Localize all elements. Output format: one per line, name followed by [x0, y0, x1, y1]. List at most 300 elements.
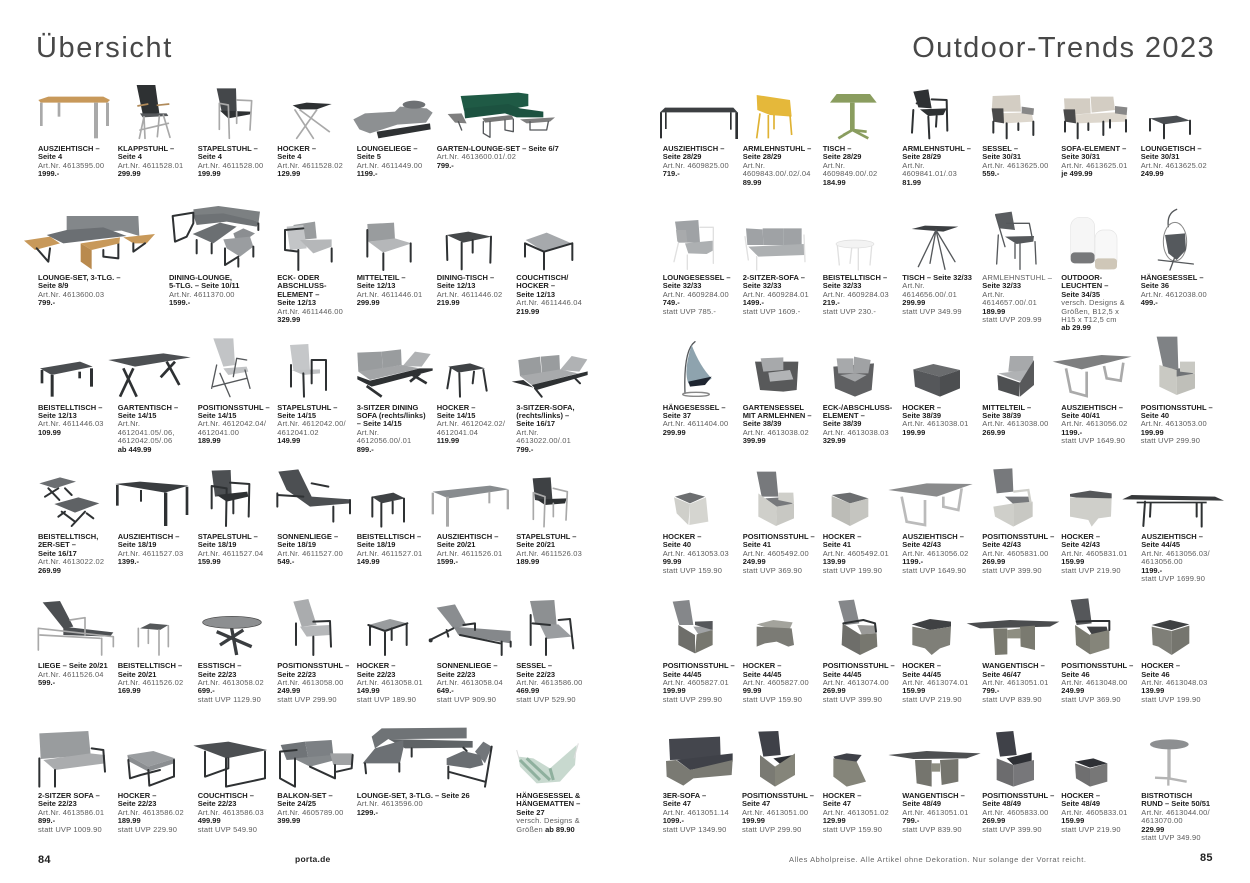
text: Armlehnstuhl — [902, 145, 971, 187]
text: Armlehnstuhl: ARMLEHNSTUHL – — [982, 273, 1052, 282]
text: Loungesessel: Seite 32/33 — [663, 281, 701, 290]
icon: wooden extending table — [38, 97, 110, 138]
text: Gartentisch: GARTENTISCH – — [118, 402, 178, 412]
text: Klappstuhl — [118, 144, 183, 178]
text: Armlehnstuhl — [982, 274, 1052, 324]
text: Dining-Tisch: 219.99 — [437, 298, 460, 307]
text: Loungesessel: 749.- — [663, 298, 680, 307]
text: Dining-Lounge: DINING-LOUNGE, — [169, 273, 232, 282]
text: Beistelltisch: BEISTELLTISCH – — [823, 273, 887, 282]
icon: dark armchair — [912, 89, 947, 138]
text: Sessel: Art.Nr. 4613586.00 — [516, 678, 582, 687]
text: Hocker — [902, 404, 968, 437]
icon: corner element — [285, 222, 332, 270]
text: Tisch: TISCH – — [823, 144, 851, 153]
text: Sonnenliege: Art.Nr. 4611527.00 — [277, 549, 343, 558]
text: Positionsstuhl: Art.Nr. 4613074.00 — [823, 678, 889, 687]
text: Loungeliege: LOUNGELIEGE – — [357, 144, 418, 153]
text: Hocker: Art.Nr. 4613038.01 — [902, 419, 968, 428]
text: Garten-Lounge-Set: GARTEN-LOUNGE-SET – Seite 6/7 — [437, 144, 559, 153]
text: Hängesessel und Hängematten: HÄNGESESSEL & — [516, 791, 580, 800]
text: Hocker — [823, 533, 889, 575]
text: Loungesessel — [663, 274, 730, 316]
text: Sonnenliege: Art.Nr. 4613058.04 — [437, 678, 503, 687]
text: Hocker: Art.Nr. 4613586.02 — [118, 808, 184, 817]
text: 3-Sitzer-Sofa: 799.- — [516, 445, 533, 454]
text: Wangentisch — [902, 792, 968, 834]
icon: balcony set — [280, 740, 353, 787]
text: Tisch: 4609849.00/.02 — [823, 169, 877, 178]
text: Hocker: statt UVP 229.90 — [118, 825, 177, 834]
text: Balkon-Set: Art.Nr. 4605789.00 — [277, 808, 344, 817]
text: Hocker: HOCKER – — [1061, 532, 1100, 541]
text: Positionsstuhl: Seite 40 — [1141, 411, 1169, 420]
text: Armlehnstuhl: Art.Nr. — [982, 290, 1005, 299]
text: 2-Sitzer Sofa: Art.Nr. 4613586.01 — [38, 808, 104, 817]
text: Hocker: Seite 4 — [277, 152, 301, 161]
text: Bistrotisch rund: Art.Nr. 4613044.00/ — [1141, 808, 1210, 817]
text: Klappstuhl: 299.99 — [118, 169, 141, 178]
text: Gartentisch: Art.Nr. — [118, 419, 140, 428]
text: Ausziehtisch: Art.Nr. 4611527.03 — [118, 549, 183, 558]
icon: two seater sofa — [39, 731, 105, 787]
icon: green table — [830, 94, 877, 138]
text: Gartensessel: Seite 38/39 — [743, 419, 781, 428]
text: Stapelstuhl — [198, 144, 263, 178]
text: Ausziehtisch Seite 4: Art.Nr. 4613595.00 — [38, 161, 104, 170]
text: Stapelstuhl: 189.99 — [516, 557, 539, 566]
text: Eck- oder Abschlusselement: ELEMENT – — [277, 290, 319, 299]
text: Stapelstuhl: STAPELSTUHL – — [198, 144, 258, 153]
text: Beistelltisch 2er-Set: 2ER-SET – — [38, 540, 76, 549]
text: Positionsstuhl — [823, 662, 895, 704]
text: Klappstuhl: Art.Nr. 4611528.01 — [118, 161, 183, 170]
icon: rattan stool light — [832, 493, 868, 526]
text: Positionsstuhl Seite 44/45: statt UVP 299.90 — [663, 695, 722, 704]
text: Ausziehtisch: Seite 40/41 — [1061, 411, 1100, 420]
text: Positionsstuhl — [1141, 404, 1213, 446]
text: Klappstuhl: KLAPPSTUHL – — [118, 144, 174, 153]
text: Liege — [38, 661, 108, 687]
text: Sonnenliege: Seite 18/19 — [277, 540, 316, 549]
icon: dark stool — [447, 363, 487, 397]
text: Balkon-Set: BALKON-SET – — [277, 791, 333, 800]
text: Eck-/Abschlusselement: 329.99 — [823, 436, 846, 445]
text: Loungesessel: Art.Nr. 4609284.00 — [663, 290, 729, 299]
text: Couchtisch: 499.99 — [198, 816, 221, 825]
text: Hocker: HOCKER – — [902, 661, 941, 670]
text: Positionsstuhl: 269.99 — [982, 816, 1005, 825]
text: Hocker — [436, 402, 505, 445]
text: Hängesessel: Art.Nr. 4612038.00 — [1141, 290, 1207, 299]
text: Dining-Tisch: Seite 12/13 — [437, 281, 475, 290]
text: Hängesessel und Hängematten: Größen ab 89.90 — [516, 825, 575, 834]
text: Beistelltisch 2er-Set: Seite 16/17 — [38, 549, 77, 558]
icon: armchair — [530, 600, 573, 655]
panel: furniture page 84 lower right — [363, 600, 578, 787]
text: Ausziehtisch — [118, 532, 183, 566]
text: Positionsstuhl: Seite 46 — [1061, 670, 1090, 679]
text: Dining-Lounge: 1599.- — [169, 298, 190, 307]
icon: reclining chair — [293, 599, 331, 655]
text: Tisch: 4614656.00/.01 — [902, 290, 957, 299]
text: Positionsstuhl: Art.Nr. 4613048.00 — [1061, 678, 1128, 687]
text: 2-Sitzer-Sofa: Seite 32/33 — [743, 281, 781, 290]
text: 3-Sitzer Dining Sofa: 3-SITZER DINING — [357, 402, 418, 412]
text: Positionsstuhl: statt UVP 399.90 — [823, 695, 882, 704]
text: Hängesessel Seite 37: Art.Nr. 4611404.00 — [663, 419, 728, 428]
text: Positionsstuhl: Art.Nr. 4612042.04/ — [198, 419, 266, 428]
text: 3er-Sofa: statt UVP 1349.90 — [663, 825, 726, 834]
icon: extending table silver — [432, 486, 509, 527]
text: Outdoor-Leuchten: versch. Designs & — [1061, 298, 1125, 307]
text: Positionsstuhl: POSITIONSSTUHL – — [742, 791, 814, 800]
text: Hocker: HOCKER – — [357, 661, 395, 670]
panel: furniture page 85 middle left — [674, 342, 973, 526]
icon: lounge set with wooden shelves — [24, 216, 155, 269]
text: Hocker: statt UVP 159.90 — [823, 825, 882, 834]
text: Sessel: Art.Nr. 4613625.00 — [982, 161, 1048, 170]
text: Hocker: Art.Nr. 4605492.01 — [823, 549, 889, 558]
text: Eck-/Abschlusselement: Art.Nr. 4613038.03 — [823, 428, 889, 437]
text: Stapelstuhl: 149.99 — [277, 436, 300, 445]
panel: furniture page 84 upper left — [24, 85, 332, 270]
text: 3er-Sofa: 1099.- — [663, 816, 684, 825]
text: Wangentisch: Art.Nr. 4613051.01 — [902, 808, 968, 817]
text: Lounge-Set 3-tlg Seite 26: LOUNGE-SET, 3-TLG. – Seite 26 — [357, 791, 470, 800]
icon: dark extending table — [1122, 495, 1224, 527]
text: 2-Sitzer Sofa: 899.- — [38, 816, 55, 825]
text: Positionsstuhl — [198, 402, 270, 445]
text: Gartensessel: Art.Nr. 4613038.02 — [743, 428, 809, 437]
footer: porta.de: porta.de — [295, 854, 331, 864]
text: Hängesessel und Hängematten: Seite 27 — [516, 808, 545, 817]
text: Hocker: HOCKER – — [1141, 661, 1180, 670]
text: Positionsstuhl: Seite 22/23 — [277, 670, 316, 679]
text: Bistrotisch rund: 4613070.00 — [1141, 816, 1183, 825]
icon: side table silver — [138, 623, 168, 655]
panel: furniture page 85 lower left — [666, 600, 981, 787]
text: Positionsstuhl: statt UVP 299.90 — [277, 695, 337, 704]
text: Lounge-Set 3-tlg Seite 26: 1299.- — [357, 808, 378, 817]
text: Hängesessel und Hängematten: versch. Designs & — [516, 816, 580, 825]
text: Wangentisch: Seite 46/47 — [982, 670, 1021, 679]
icon: extending table light — [888, 483, 973, 525]
text: Beistelltisch: Seite 18/19 — [357, 540, 395, 549]
text: Positionsstuhl: statt UVP 399.90 — [982, 566, 1042, 575]
text: Ausziehtisch Seite 28/29: Seite 28/29 — [663, 152, 701, 161]
text: 3-Sitzer Dining Sofa — [356, 402, 426, 454]
text: Armlehnstuhl: Art.Nr. — [743, 161, 765, 170]
text: Sessel: SESSEL – — [982, 144, 1018, 153]
text: Beistelltisch: 149.99 — [357, 557, 380, 566]
title: Outdoor-Trends 2023: Outdoor-Trends 2023 — [912, 32, 1215, 64]
text: Positionsstuhl: statt UVP 299.90 — [1141, 436, 1200, 445]
text: Ausziehtisch: 1199.- — [1061, 428, 1082, 437]
text: Armlehnstuhl: ARMLEHNSTUHL – — [902, 144, 971, 153]
icon: rattan footstool dark cushion — [833, 753, 866, 787]
panel: furniture page 85 upper left — [660, 89, 958, 270]
text: Wangentisch: 799.- — [902, 816, 919, 825]
text: Stapelstuhl: 4612041.02 — [277, 428, 319, 437]
text: Hocker — [277, 144, 343, 178]
text: Positionsstuhl — [277, 661, 350, 704]
text: Sessel: Seite 22/23 — [516, 670, 555, 679]
text: Ausziehtisch: 1399.- — [118, 557, 139, 566]
text: Hängesessel: HÄNGESESSEL – — [1141, 273, 1204, 282]
text: Hängesessel Seite 37: Seite 37 — [663, 411, 691, 420]
icon: garden table — [108, 353, 191, 397]
text: Outdoor-Leuchten: Größen, B12,5 x — [1061, 307, 1119, 316]
text: Ausziehtisch: AUSZIEHTISCH – — [1141, 532, 1203, 541]
text: Liege: LIEGE – Seite 20/21 — [38, 661, 108, 670]
text: Sofa-Element: Seite 30/31 — [1061, 152, 1100, 161]
panel: furniture page 84 lower left — [38, 599, 353, 787]
text: Beistelltisch: Seite 32/33 — [823, 281, 861, 290]
text: Hocker: HOCKER – — [118, 791, 156, 800]
text: Ausziehtisch: statt UVP 1699.90 — [1141, 574, 1205, 583]
text: Ausziehtisch Seite 28/29: AUSZIEHTISCH – — [663, 144, 724, 153]
text: Bistrotisch rund: RUND – Seite 50/51 — [1141, 799, 1210, 808]
icon: stool dark cushion — [1152, 620, 1189, 655]
text: Liege: 599.- — [38, 678, 55, 687]
text: Positionsstuhl: Seite 47 — [742, 799, 770, 808]
text: Beistelltisch 2er-Set: 269.99 — [38, 566, 61, 575]
text: Armlehnstuhl: 89.99 — [743, 178, 761, 187]
text: Gartensessel: GARTENSESSEL — [743, 402, 804, 412]
text: Hocker — [902, 662, 968, 704]
text: Ausziehtisch Seite 4: 1999.- — [38, 169, 59, 178]
text: Loungeliege: Seite 5 — [357, 152, 381, 161]
text: Couchtisch/Hocker: 219.99 — [516, 307, 539, 316]
text: Positionsstuhl: 199.99 — [742, 816, 765, 825]
text: Positionsstuhl Seite 44/45: 199.99 — [663, 686, 686, 695]
text: 3er-Sofa: 3ER-SOFA – — [663, 791, 706, 800]
icon: white side table — [836, 240, 874, 270]
text: Balkon-Set: 399.99 — [277, 816, 300, 825]
text: Mittelteil: 269.99 — [982, 428, 1005, 437]
footer: disclaimer: Alles Abholpreise. Alle Artikel ohne Dekoration. Nur solange der Vorrat reicht. — [789, 855, 1086, 864]
text: Esstisch: Art.Nr. 4613058.02 — [198, 678, 264, 687]
text: Mittelteil — [982, 404, 1048, 437]
text: Beistelltisch: 169.99 — [118, 686, 141, 695]
text: Positionsstuhl: Seite 41 — [743, 540, 771, 549]
text: Beistelltisch 2er-Set: BEISTELLTISCH, — [38, 532, 98, 541]
text: Ausziehtisch — [436, 532, 502, 566]
icon: reclining chair dark cushion — [758, 731, 795, 787]
text: 3-Sitzer-Sofa: Seite 16/17 — [516, 419, 555, 428]
text: Positionsstuhl: Art.Nr. 4605833.00 — [982, 808, 1048, 817]
text: Ausziehtisch Seite 4: Seite 4 — [38, 152, 62, 161]
text: Gartentisch — [118, 402, 178, 454]
text: Couchtisch/Hocker: Seite 12/13 — [516, 290, 555, 299]
icon: reclining chair rattan white — [1157, 337, 1195, 395]
text: Outdoor-Leuchten — [1061, 274, 1125, 333]
text: Stapelstuhl: Seite 20/21 — [516, 540, 555, 549]
text: Wangentisch: statt UVP 839.90 — [982, 695, 1042, 704]
text: Hocker: Seite 41 — [823, 540, 851, 549]
icon: side table — [40, 362, 93, 397]
text: Loungesessel: LOUNGESESSEL – — [663, 273, 730, 282]
text: Armlehnstuhl: 189.99 — [982, 307, 1005, 316]
icon: cheek table — [888, 751, 981, 787]
text: Mittelteil: 299.99 — [357, 298, 380, 307]
text: 2-Sitzer Sofa — [38, 791, 104, 834]
text: Wangentisch: 799.- — [982, 686, 999, 695]
icon: long dark table — [660, 108, 738, 139]
text: Liege: Art.Nr. 4611526.04 — [38, 670, 104, 679]
text: Hocker: 139.99 — [823, 557, 846, 566]
text: Loungetisch — [1141, 145, 1207, 179]
text: Ausziehtisch: AUSZIEHTISCH – — [1061, 402, 1123, 412]
text: 2-Sitzer-Sofa: statt UVP 1609.- — [743, 307, 800, 316]
text: Ausziehtisch: Seite 44/45 — [1141, 540, 1180, 549]
text: Gartentisch: ab 449.99 — [118, 445, 151, 454]
text: Positionsstuhl: Art.Nr. 4613053.00 — [1141, 419, 1207, 428]
text: Gartentisch: 4612042.05/.06 — [118, 436, 172, 445]
icon: coffee table stool — [525, 233, 572, 269]
text: Positionsstuhl: statt UVP 399.90 — [982, 825, 1042, 834]
text: Ausziehtisch Seite 28/29: Art.Nr. 4609825.00 — [663, 161, 729, 170]
text: Hocker: statt UVP 219.90 — [1061, 566, 1121, 575]
text: Eck-/Abschlusselement: Seite 38/39 — [823, 419, 861, 428]
text: Beistelltisch: Art.Nr. 4611527.01 — [357, 549, 422, 558]
icon: side table — [372, 493, 405, 527]
text: Couchtisch: Art.Nr. 4613586.03 — [198, 808, 264, 817]
text: Esstisch — [198, 661, 264, 704]
text: Positionsstuhl Seite 44/45: POSITIONSSTUHL – — [663, 661, 735, 670]
icon: middle part seat — [367, 223, 412, 270]
icon: lounge lounger — [353, 101, 433, 138]
text: Ausziehtisch Seite 28/29 — [662, 144, 729, 178]
icon: lounge table — [1150, 116, 1190, 138]
text: Balkon-Set: Seite 24/25 — [277, 799, 316, 808]
text: Armlehnstuhl: 4609843.00/.02/.04 — [743, 169, 811, 178]
text: Eck- oder Abschlusselement: Seite 12/13 — [277, 298, 316, 307]
text: Outdoor-Leuchten: Seite 34/35 — [1061, 290, 1100, 299]
icon: thin leg table — [912, 226, 958, 269]
text: Sofa-Element: je 499.99 — [1061, 169, 1093, 178]
text: Dining-Lounge: 5-TLG. – Seite 10/11 — [169, 281, 239, 290]
icon: extending table dark — [115, 482, 188, 526]
text: Loungeliege — [356, 144, 422, 178]
text: Hocker: Seite 48/49 — [1061, 799, 1100, 808]
icon: stacking chair — [217, 88, 252, 138]
text: Ausziehtisch Seite 28/29: 719.- — [663, 169, 680, 178]
text: Esstisch: Seite 22/23 — [198, 670, 236, 679]
icon: stacking chair silver — [533, 477, 567, 527]
text: Lounge-Set 3-tlg Seite 26: Art.Nr. 4613596.00 — [357, 799, 423, 808]
text: Positionsstuhl: POSITIONSSTUHL – — [1061, 661, 1133, 670]
icon: folding stool — [293, 103, 332, 138]
text: Hocker: 159.99 — [1061, 816, 1084, 825]
text: Stapelstuhl: STAPELSTUHL – — [516, 532, 576, 541]
text: Wangentisch — [982, 662, 1048, 704]
text: Positionsstuhl: 269.99 — [823, 686, 846, 695]
text: Wangentisch: WANGENTISCH – — [902, 791, 965, 800]
text: Positionsstuhl: Art.Nr. 4605492.00 — [743, 549, 809, 558]
text: Positionsstuhl: 199.99 — [1141, 428, 1164, 437]
text: Wangentisch: Seite 48/49 — [902, 799, 941, 808]
text: 2-Sitzer Sofa: Seite 22/23 — [38, 799, 77, 808]
text: Ausziehtisch — [1061, 404, 1128, 446]
text: Positionsstuhl: statt UVP 369.90 — [743, 566, 802, 575]
text: Hocker: Seite 38/39 — [902, 411, 941, 420]
text: Bistrotisch rund: BISTROTISCH — [1141, 791, 1192, 800]
icon: dining table — [447, 232, 492, 269]
text: Couchtisch — [198, 791, 264, 834]
text: Armlehnstuhl: Seite 28/29 — [743, 152, 781, 161]
text: Tisch: Art.Nr. — [902, 281, 925, 290]
text: Beistelltisch — [823, 274, 889, 316]
text: Loungeliege: 1199.- — [357, 169, 378, 178]
text: Hängesessel und Hängematten: HÄNGEMATTEN – — [516, 799, 580, 808]
text: 3-Sitzer Dining Sofa: Art.Nr. — [357, 428, 379, 437]
text: Stapelstuhl: Seite 14/15 — [277, 411, 316, 420]
text: Hocker Seite 40 — [663, 533, 729, 575]
text: Stapelstuhl — [198, 532, 263, 566]
text: Eck- oder Abschlusselement: Art.Nr. 4611446.00 — [277, 307, 343, 316]
text: Loungetisch: LOUNGETISCH – — [1141, 144, 1202, 153]
text: Wangentisch: WANGENTISCH – — [982, 661, 1045, 670]
text: Lounge-Set 3-tlg: 799.- — [38, 298, 55, 307]
text: Mittelteil: MITTELTEIL – — [982, 402, 1031, 412]
text: Hocker: Art.Nr. 4613058.01 — [357, 678, 423, 687]
text: Stapelstuhl: Art.Nr. 4611527.04 — [198, 549, 263, 558]
icon: lounger silver — [38, 601, 113, 655]
text: Positionsstuhl: Art.Nr. 4613051.00 — [742, 808, 808, 817]
text: Ausziehtisch: AUSZIEHTISCH – — [437, 532, 498, 541]
icon: reclining chair rattan — [993, 468, 1033, 527]
text: Ausziehtisch: 1199.- — [902, 557, 923, 566]
text: Hocker — [1141, 662, 1208, 704]
text: Armlehnstuhl: 81.99 — [902, 178, 921, 187]
text: Loungetisch: Art.Nr. 4613625.02 — [1141, 161, 1207, 170]
text: Hocker: Seite 22/23 — [357, 670, 395, 679]
icon: hammock — [517, 743, 578, 783]
text: Tisch — [823, 145, 877, 187]
text: 2-Sitzer-Sofa: 1499.- — [743, 298, 764, 307]
text: Eck-/Abschlusselement: ECK-/ABSCHLUSS- — [823, 402, 892, 412]
text: 3er-Sofa — [663, 792, 729, 834]
text: Sessel: Seite 30/31 — [982, 152, 1021, 161]
text: Beistelltisch — [118, 661, 183, 695]
text: 2-Sitzer-Sofa: Art.Nr. 4609284.01 — [743, 290, 809, 299]
text: Beistelltisch — [356, 532, 422, 566]
text: Stapelstuhl: Seite 18/19 — [198, 540, 236, 549]
text: Loungesessel: statt UVP 785.- — [663, 307, 716, 316]
text: Esstisch: ESSTISCH – — [198, 661, 241, 670]
icon: footstool — [127, 751, 175, 786]
icon: rattan corner element — [833, 357, 874, 397]
text: Positionsstuhl: POSITIONSSTUHL – — [982, 532, 1054, 541]
icon: white rattan reclining chair — [757, 472, 794, 526]
text: Positionsstuhl: 249.99 — [743, 557, 766, 566]
icon: extending table grey — [1053, 355, 1132, 396]
text: Lounge-Set 3-tlg: LOUNGE-SET, 3-TLG. – — [38, 273, 121, 282]
text: Armlehnstuhl — [743, 145, 811, 187]
icon: white rattan stool — [674, 493, 708, 525]
text: Dining-Lounge: Art.Nr. 4611370.00 — [169, 290, 235, 299]
text: Hocker: Art.Nr. 4611528.02 — [277, 161, 343, 170]
text: Ausziehtisch: AUSZIEHTISCH – — [902, 532, 964, 541]
text: 3-Sitzer Dining Sofa: – Seite 14/15 — [357, 419, 402, 428]
text: Positionsstuhl Seite 44/45: Art.Nr. 4605827.01 — [663, 678, 729, 687]
text: Ausziehtisch: Art.Nr. 4613056.03/ — [1141, 549, 1210, 558]
icon: stool dark — [1075, 758, 1107, 787]
text: Hocker Seite 40: Seite 40 — [663, 540, 691, 549]
text: Wangentisch: Art.Nr. 4613051.01 — [982, 678, 1048, 687]
